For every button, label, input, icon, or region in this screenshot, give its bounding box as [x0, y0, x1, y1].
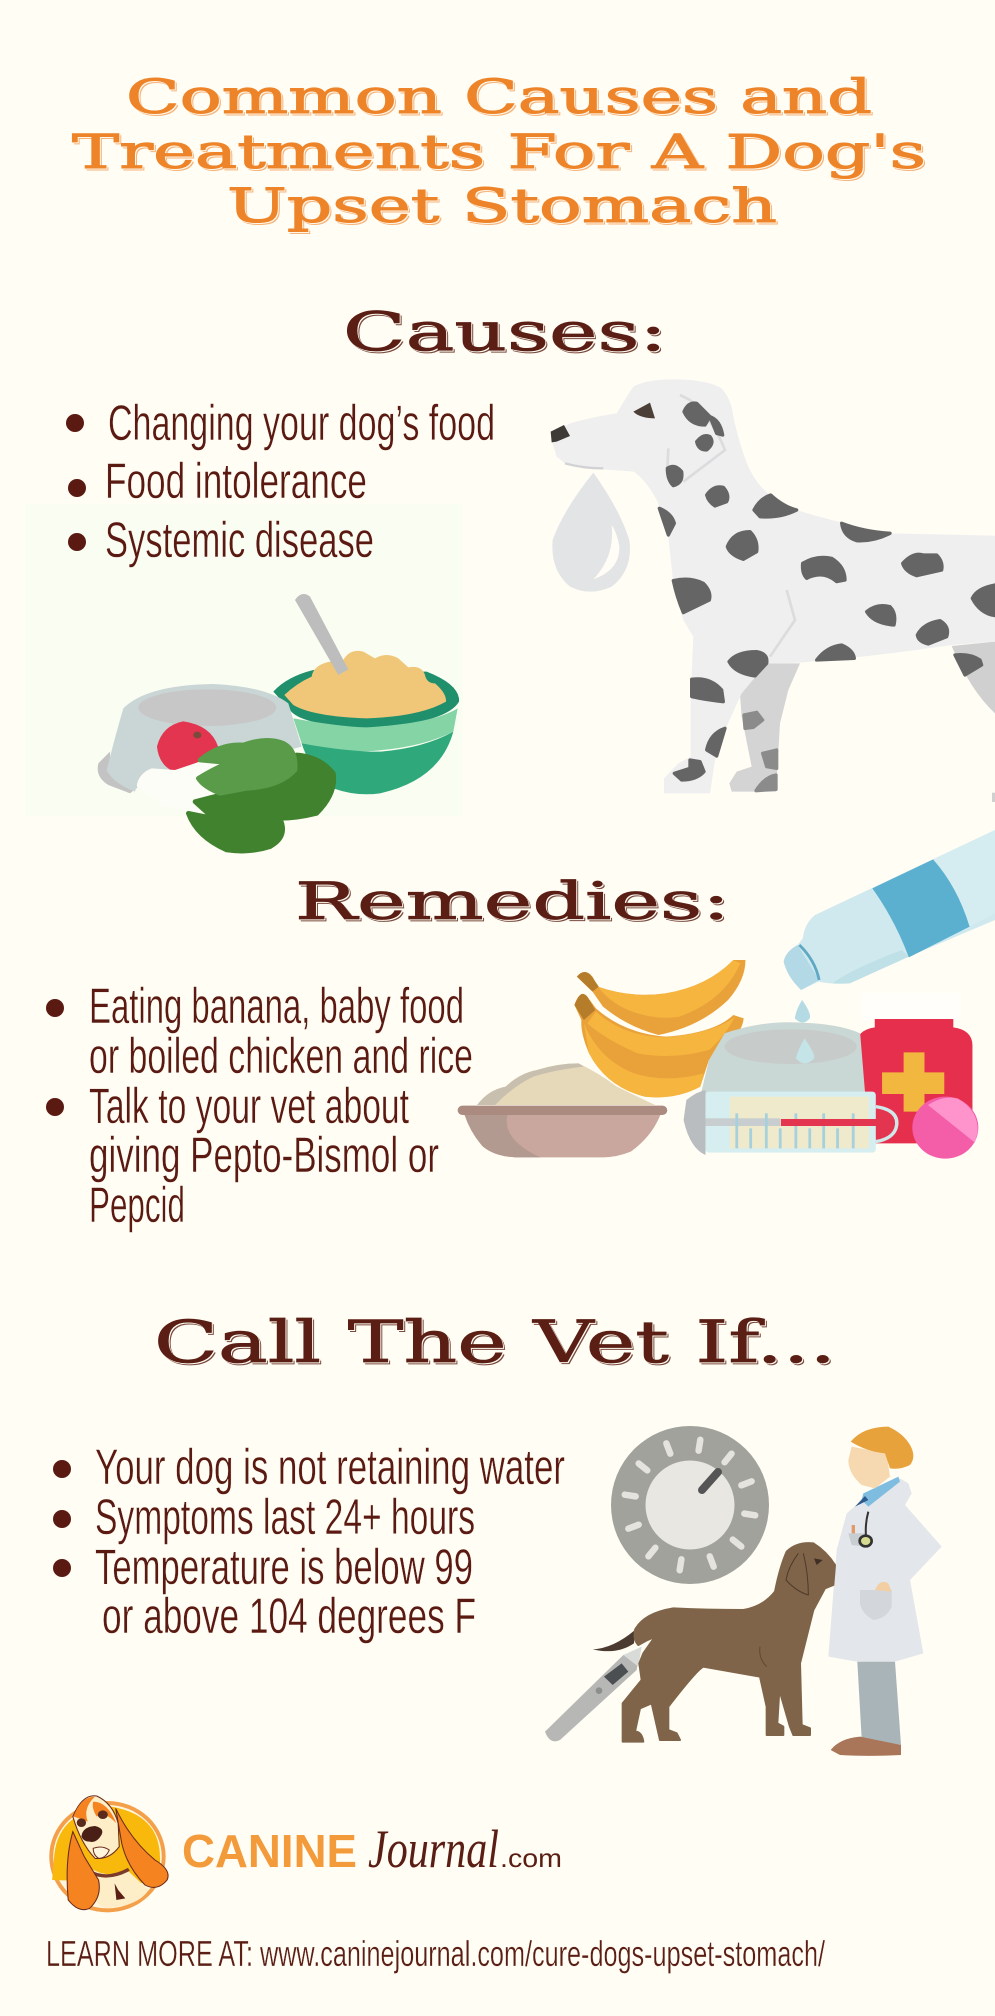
icon: apple — [158, 723, 217, 770]
heading: remedies: Remedies: — [295, 873, 730, 932]
icon: nose and eye — [551, 403, 655, 442]
heading: call the vet: Call The Vet If... — [154, 1308, 836, 1376]
list: call the vet: Your dog is not retaining water — [95, 1439, 565, 1495]
icon: brown dog — [593, 1543, 835, 1742]
title: Treatments For A Dog's — [72, 125, 926, 180]
title: Common Causes and — [126, 70, 872, 125]
list: call the vet: Symptoms last 24+ hours — [95, 1489, 475, 1545]
icon: thermometer dial — [611, 1426, 769, 1584]
icon: water bottle — [784, 830, 995, 990]
icon: dog thermometer — [545, 1647, 642, 1741]
icon: bananas — [574, 960, 745, 1097]
icon: basset hound badge — [49, 1796, 168, 1912]
icon: medicine bottle — [856, 993, 972, 1143]
list: causes: Food intolerance — [105, 453, 367, 509]
icon: grey dog bowl — [98, 684, 302, 793]
list: causes — [66, 395, 495, 568]
panel: food illustration backdrop — [25, 504, 463, 816]
wordmark: journal: Journal — [368, 1819, 499, 1879]
icon: spoon — [295, 594, 348, 675]
illustration: remedies group — [458, 830, 995, 1159]
icon: drool drop — [552, 473, 630, 592]
list: call the vet: or above 104 degrees F — [102, 1588, 476, 1644]
icon: broccoli — [188, 740, 334, 851]
list: call the vet — [53, 1439, 565, 1644]
icon: rice bowl — [458, 1063, 667, 1157]
list: remedies: Eating banana, baby food — [89, 978, 464, 1034]
icon: syringe — [684, 1090, 897, 1155]
list: causes: Changing your dog’s food — [108, 395, 495, 451]
logo: canine journal — [49, 1796, 562, 1912]
list: remedies: Talk to your vet about — [89, 1078, 409, 1134]
list: remedies: Pepcid — [89, 1177, 185, 1233]
heading: causes: Causes: — [343, 302, 667, 363]
icon: water drop — [795, 1000, 810, 1022]
list: remedies: giving Pepto-Bismol or — [89, 1127, 439, 1183]
icon: vet — [828, 1427, 942, 1756]
list: causes: Systemic disease — [105, 512, 374, 568]
wordmark: dot com: .com — [500, 1843, 562, 1873]
wordmark: canine: CANINE — [182, 1825, 357, 1877]
icon: coat spots — [659, 403, 995, 791]
icon: cauliflower — [137, 762, 247, 818]
list: remedies — [46, 978, 473, 1233]
list: remedies: or boiled chicken and rice — [89, 1028, 473, 1084]
icon: water bowl — [700, 1022, 865, 1097]
icon: dalmatian with drool drop — [551, 379, 995, 802]
title: Upset Stomach — [227, 179, 777, 234]
icon: green bowl with food — [273, 651, 459, 794]
icon: pink pill — [912, 1097, 978, 1159]
list: call the vet: Temperature is below 99 — [95, 1539, 473, 1595]
icon: dog food bowls and broccoli — [98, 594, 459, 851]
title — [72, 70, 926, 234]
illustration: vet with dog — [545, 1427, 942, 1756]
